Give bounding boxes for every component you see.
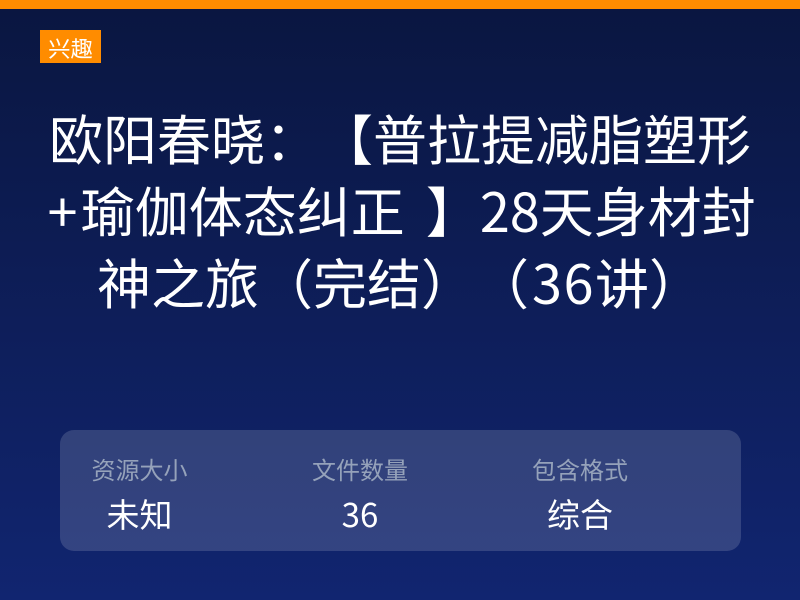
stat: format: 包含格式 [532,451,628,486]
stat: file size: 资源大小 [92,451,188,486]
stat: format [532,451,628,537]
stat: format: 综合 [547,489,613,537]
stat: file count: 文件数量 [312,451,408,486]
top accent bar [0,0,800,9]
stat: file size [92,451,188,537]
category tag [40,30,101,63]
panel: stats [60,430,741,551]
stat: file size: 未知 [106,489,172,537]
stat: file count: 36 [342,489,378,537]
category tag: 兴趣 [48,32,93,64]
stat: file count [312,451,408,537]
title: 欧阳春晓：【普拉提减脂塑形+瑜伽体态纠正 】28天身材封神之旅（完结）（36讲） [47,97,756,320]
